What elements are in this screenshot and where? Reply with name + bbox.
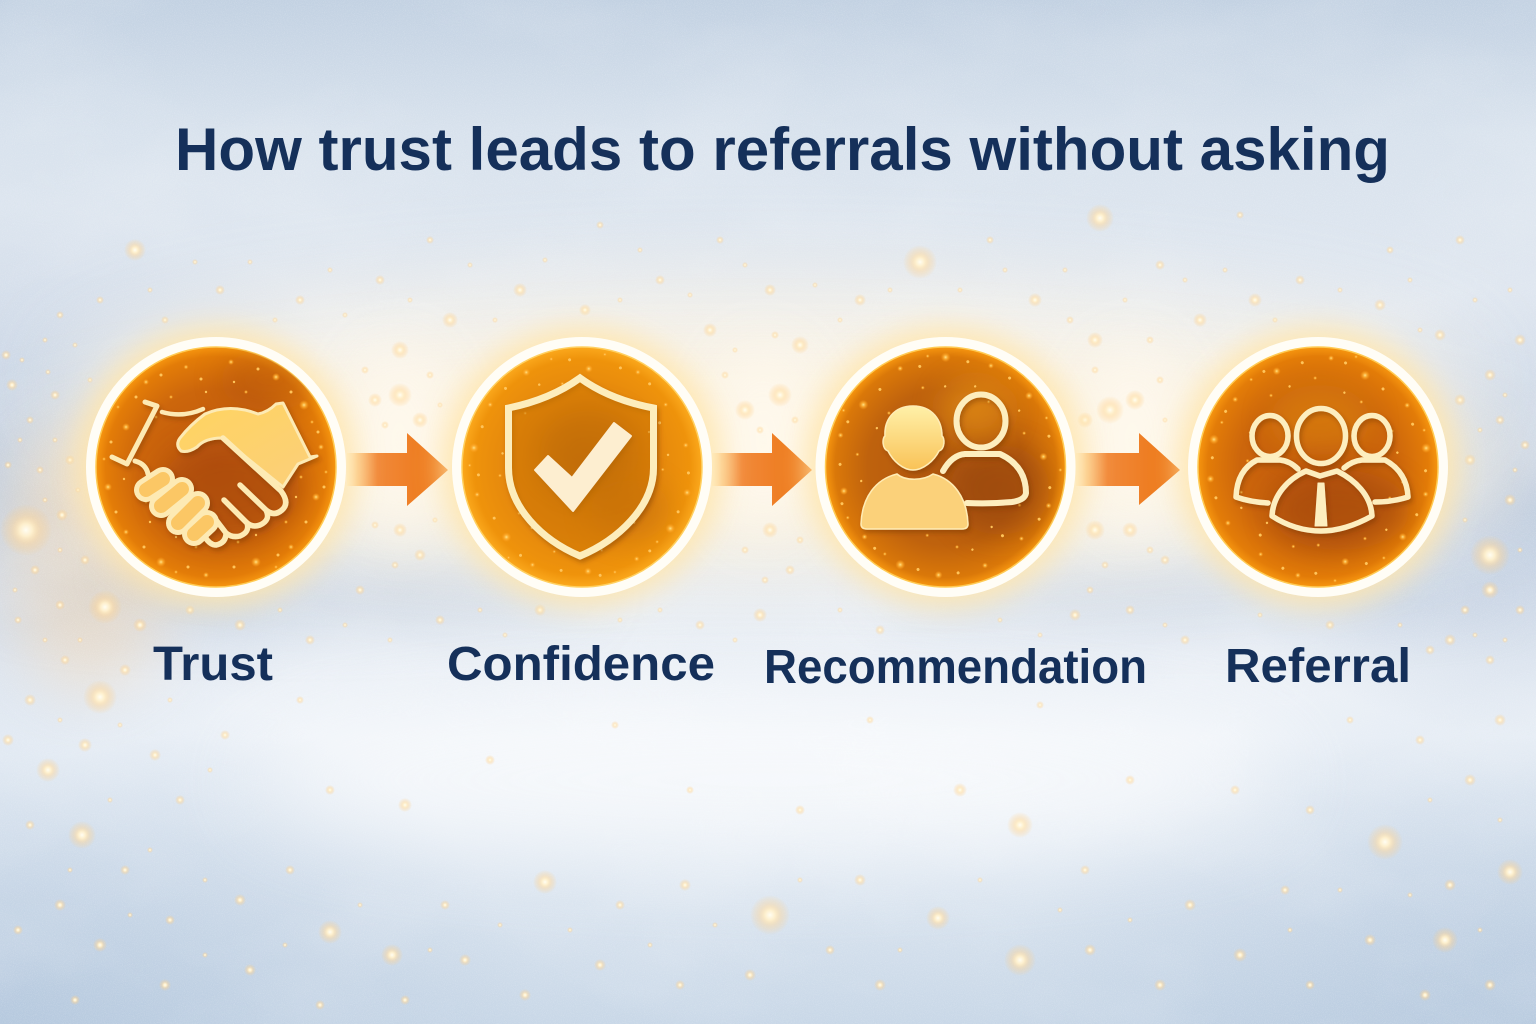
title: How trust leads to referrals without asking (175, 116, 1390, 183)
label: Recommendation: Recommendation (764, 641, 1147, 694)
front person (861, 406, 968, 529)
right hand and thumb (178, 403, 317, 487)
label: Confidence: Confidence (447, 638, 715, 691)
label: Referral: Referral (1225, 640, 1411, 693)
wrist curve (135, 461, 148, 474)
arrow 1 (347, 433, 448, 506)
label: Trust: Trust (153, 638, 273, 691)
back person (943, 394, 1026, 503)
centre person (1272, 408, 1372, 531)
sleeve line (162, 409, 203, 414)
right person (1344, 416, 1408, 502)
step 1: trust circle (76, 327, 356, 607)
icon: two people (861, 394, 1026, 529)
step 4: referral circle (1163, 310, 1476, 624)
step 3: recommendation circle (793, 314, 1098, 617)
arrow 3 (1076, 433, 1180, 505)
step 2: confidence circle (439, 323, 722, 610)
left cuff (112, 402, 157, 464)
fingers of the left hand (146, 479, 207, 534)
check mark (535, 423, 631, 511)
left person (1236, 416, 1298, 503)
arrow 2 (712, 433, 812, 506)
fingers of the right hand (205, 438, 286, 545)
glow between the circles (349, 345, 1182, 535)
icon: handshake (112, 402, 317, 545)
sparkles (0, 204, 1530, 1010)
shield outline (508, 378, 654, 556)
icon: group of three people (1236, 408, 1408, 531)
icon: shield with check mark (508, 378, 654, 556)
